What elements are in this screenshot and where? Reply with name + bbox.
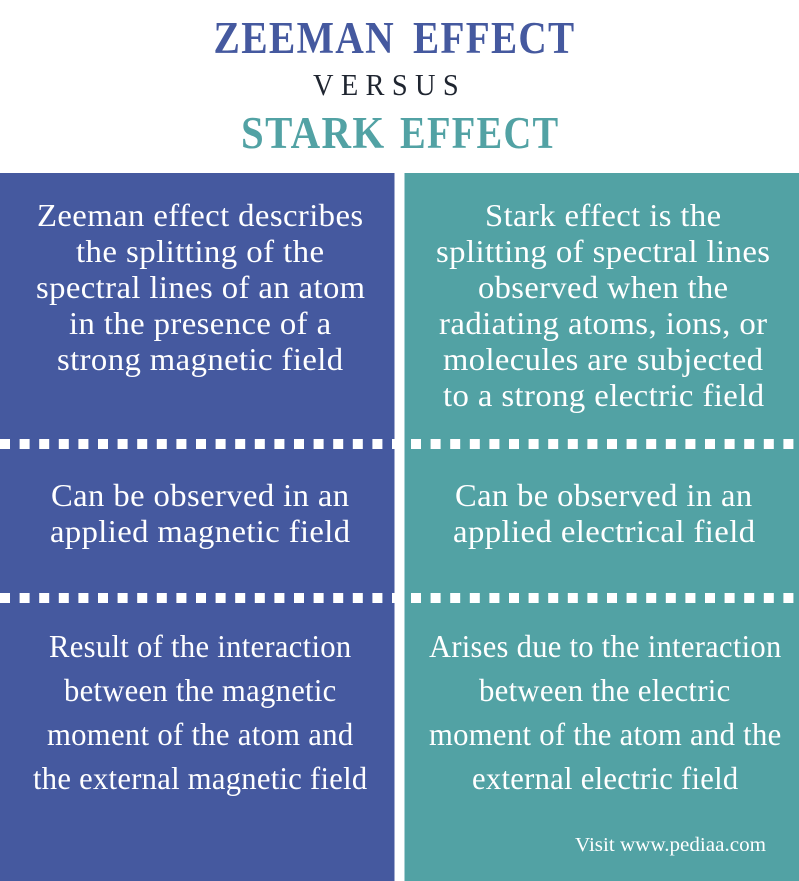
heading: Stark effect — [241, 108, 560, 158]
text: Stark definition: radiating atoms, ions, or — [439, 305, 768, 341]
text: Zeeman definition: spectral lines of an atom — [36, 269, 366, 305]
heading: Stark effect: STARK — [241, 108, 386, 158]
text: Zeeman interaction: between the magnetic — [64, 672, 336, 708]
text: Zeeman observation: applied magnetic field — [50, 513, 350, 549]
text: Zeeman definition: the splitting of the — [76, 233, 324, 269]
text: Zeeman interaction — [33, 628, 368, 796]
heading: Zeeman effect: EFFECT — [413, 13, 576, 63]
heading: Zeeman effect: ZEEMAN — [214, 13, 395, 63]
text: Stark definition: molecules are subjected — [443, 341, 764, 377]
text: Stark definition: Stark effect is the — [485, 197, 722, 233]
text: Stark observation: applied electrical field — [453, 513, 756, 549]
heading: Stark effect: EFFECT — [400, 108, 560, 158]
text: Stark observation — [453, 477, 756, 549]
text: Stark definition — [436, 197, 770, 413]
panel: Zeeman column — [0, 173, 394, 881]
text: Stark interaction: moment of the atom and the — [429, 716, 782, 752]
text: Stark observation: Can be observed in an — [455, 477, 752, 513]
panel: Stark column — [404, 173, 799, 881]
text: Zeeman observation — [50, 477, 350, 549]
text: Zeeman definition: strong magnetic field — [57, 341, 344, 377]
text: Zeeman interaction: the external magnetic field — [33, 760, 368, 796]
text: Stark interaction: between the electric — [479, 672, 730, 708]
text: Stark interaction: external electric field — [472, 760, 738, 796]
heading: versus: VERSUS — [313, 67, 466, 102]
text: Zeeman definition — [36, 197, 366, 377]
dotted divider: lower — [0, 593, 793, 603]
text: Zeeman definition: Zeeman effect describes — [37, 197, 363, 233]
footer: source credit: Visit www.pediaa.com — [575, 834, 766, 856]
text: Zeeman observation: Can be observed in an — [51, 477, 350, 513]
text: Stark interaction — [429, 628, 782, 796]
text: Stark interaction: Arises due to the interaction — [429, 628, 782, 664]
text: Zeeman interaction: Result of the interaction — [49, 628, 352, 664]
text: Stark definition: splitting of spectral lines — [436, 233, 770, 269]
dotted divider: upper — [0, 439, 793, 449]
text: Zeeman interaction: moment of the atom and — [47, 716, 354, 752]
text: Zeeman definition: in the presence of a — [69, 305, 332, 341]
heading: Zeeman effect — [214, 13, 576, 63]
text: Stark definition: to a strong electric field — [443, 377, 764, 413]
title — [214, 13, 576, 158]
text: Stark definition: observed when the — [478, 269, 728, 305]
